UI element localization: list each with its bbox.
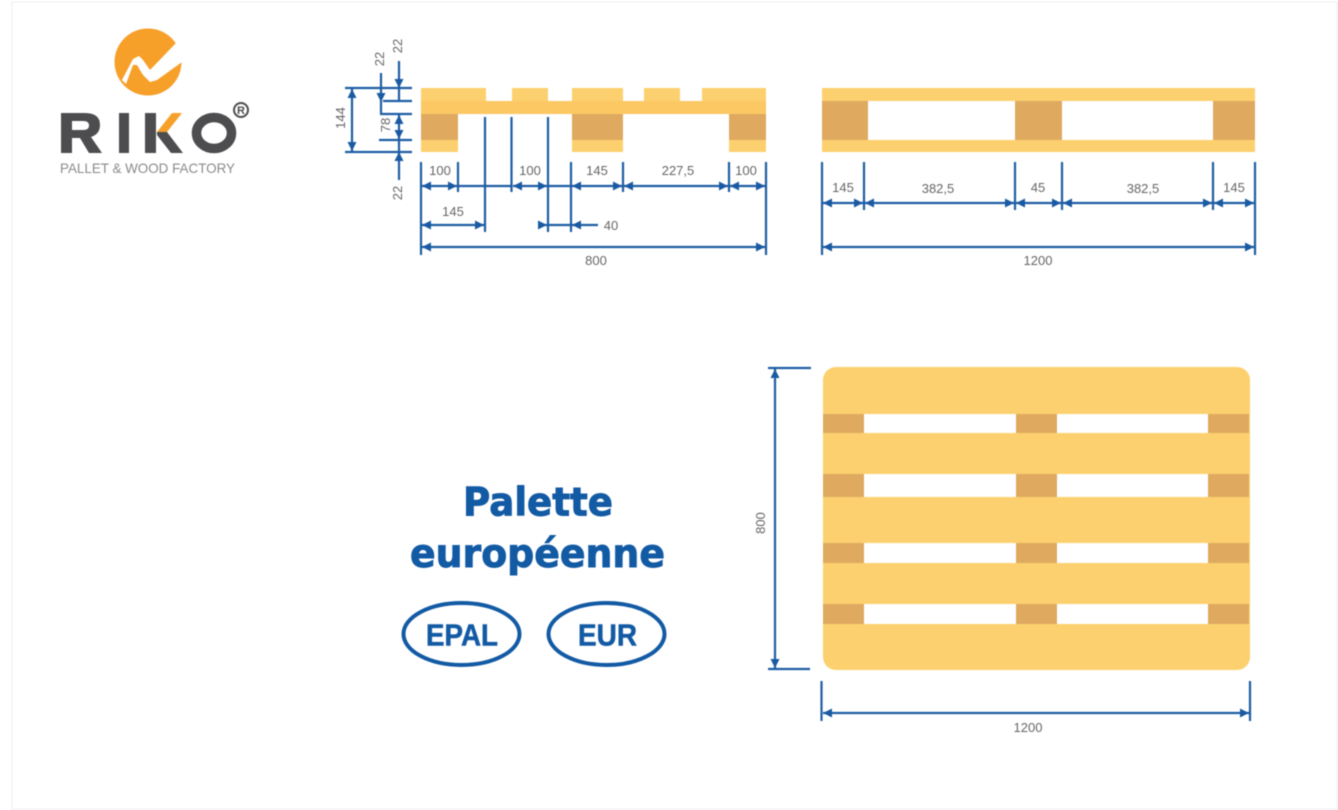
dimensions: 1200 side: 145 <box>1223 180 1245 195</box>
dimensions: 800 width: 145 <box>586 163 608 178</box>
dimensions: height (left): 144 <box>333 107 348 129</box>
registered mark: R <box>237 105 245 117</box>
title: Palette <box>463 480 613 526</box>
dimensions: 1200 side: 145 <box>832 180 854 195</box>
dimensions: height (left): 22 <box>390 186 405 200</box>
dimensions: 800 width: 100 <box>519 163 541 178</box>
dimensions: 1200 side: 45 <box>1031 180 1045 195</box>
badge: EUR <box>548 603 664 665</box>
badge: EUR: EUR <box>578 618 637 652</box>
dimensions: 800 width: 800 <box>585 253 607 268</box>
dimensions: 800 width: 100 <box>429 163 451 178</box>
badge: EPAL: EPAL <box>426 618 498 652</box>
badge: EPAL <box>404 603 520 665</box>
dimensions: 1200 side <box>822 162 1255 268</box>
dimensions: 800 width: 145 <box>442 204 464 219</box>
title <box>410 480 665 577</box>
dimensions: height (left): 22 <box>390 39 405 53</box>
dimensions: 1200 side: 382,5 <box>922 181 954 196</box>
logo: RIKO <box>60 28 248 176</box>
dimensions: 800 width <box>421 117 766 268</box>
top view pallet <box>823 367 1250 670</box>
dimensions: 800 width: 100 <box>735 163 757 178</box>
deck boards <box>823 367 1250 670</box>
icon: orange circle emblem <box>114 28 186 96</box>
blocks <box>822 101 1255 140</box>
dimensions: top view: 800 <box>753 512 768 534</box>
dimensions: top view: 1200 <box>1014 720 1042 735</box>
dimensions: 800 width: 40 <box>604 218 618 233</box>
registered mark <box>234 103 248 117</box>
side view: 800 mm pallet end <box>421 88 766 152</box>
dimensions: height (left): 22 <box>372 52 387 66</box>
dimensions: 800 width: 227,5 <box>662 163 694 178</box>
blocks <box>823 414 1249 624</box>
gaps <box>864 414 1208 624</box>
title: européenne <box>410 532 665 577</box>
tagline: PALLET & WOOD FACTORY <box>60 160 236 176</box>
top boards <box>421 88 766 102</box>
blocks <box>421 114 766 152</box>
dimensions: height (left): 78 <box>378 118 393 132</box>
dimensions: 1200 side: 382,5 <box>1127 181 1159 196</box>
bearer board <box>421 101 766 114</box>
wordmark RIKO <box>61 113 232 153</box>
boards <box>822 88 1255 101</box>
side view: 1200 mm pallet side <box>822 88 1255 152</box>
dimensions: height (left) <box>333 39 412 200</box>
dimensions: 1200 side: 1200 <box>1024 253 1052 268</box>
dimensions: top view <box>753 368 1250 735</box>
